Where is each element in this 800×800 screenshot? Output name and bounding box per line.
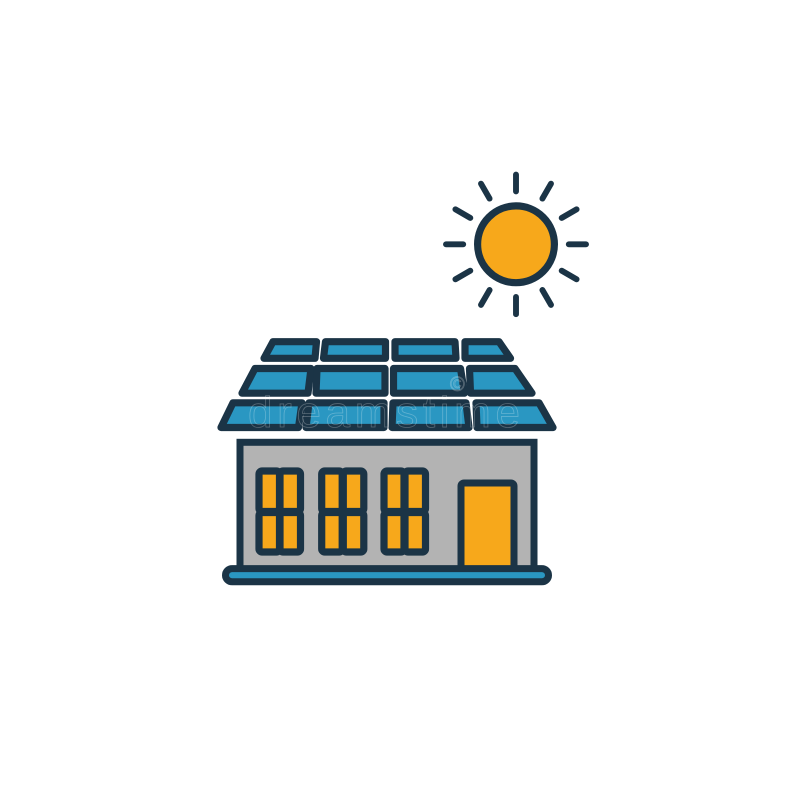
- window 2: [322, 471, 364, 552]
- window 3: [384, 471, 426, 552]
- sun disc: [478, 206, 554, 283]
- window 1: [259, 471, 300, 552]
- sun rays: [446, 175, 586, 314]
- door: [461, 483, 514, 570]
- icon: sun: [446, 175, 586, 314]
- watermark: ©: [450, 374, 465, 396]
- foundation: [226, 569, 548, 582]
- windows: [259, 471, 426, 552]
- roof solar panels: [221, 342, 553, 428]
- watermark: dreamstime: [248, 388, 520, 437]
- house wall: [240, 442, 534, 572]
